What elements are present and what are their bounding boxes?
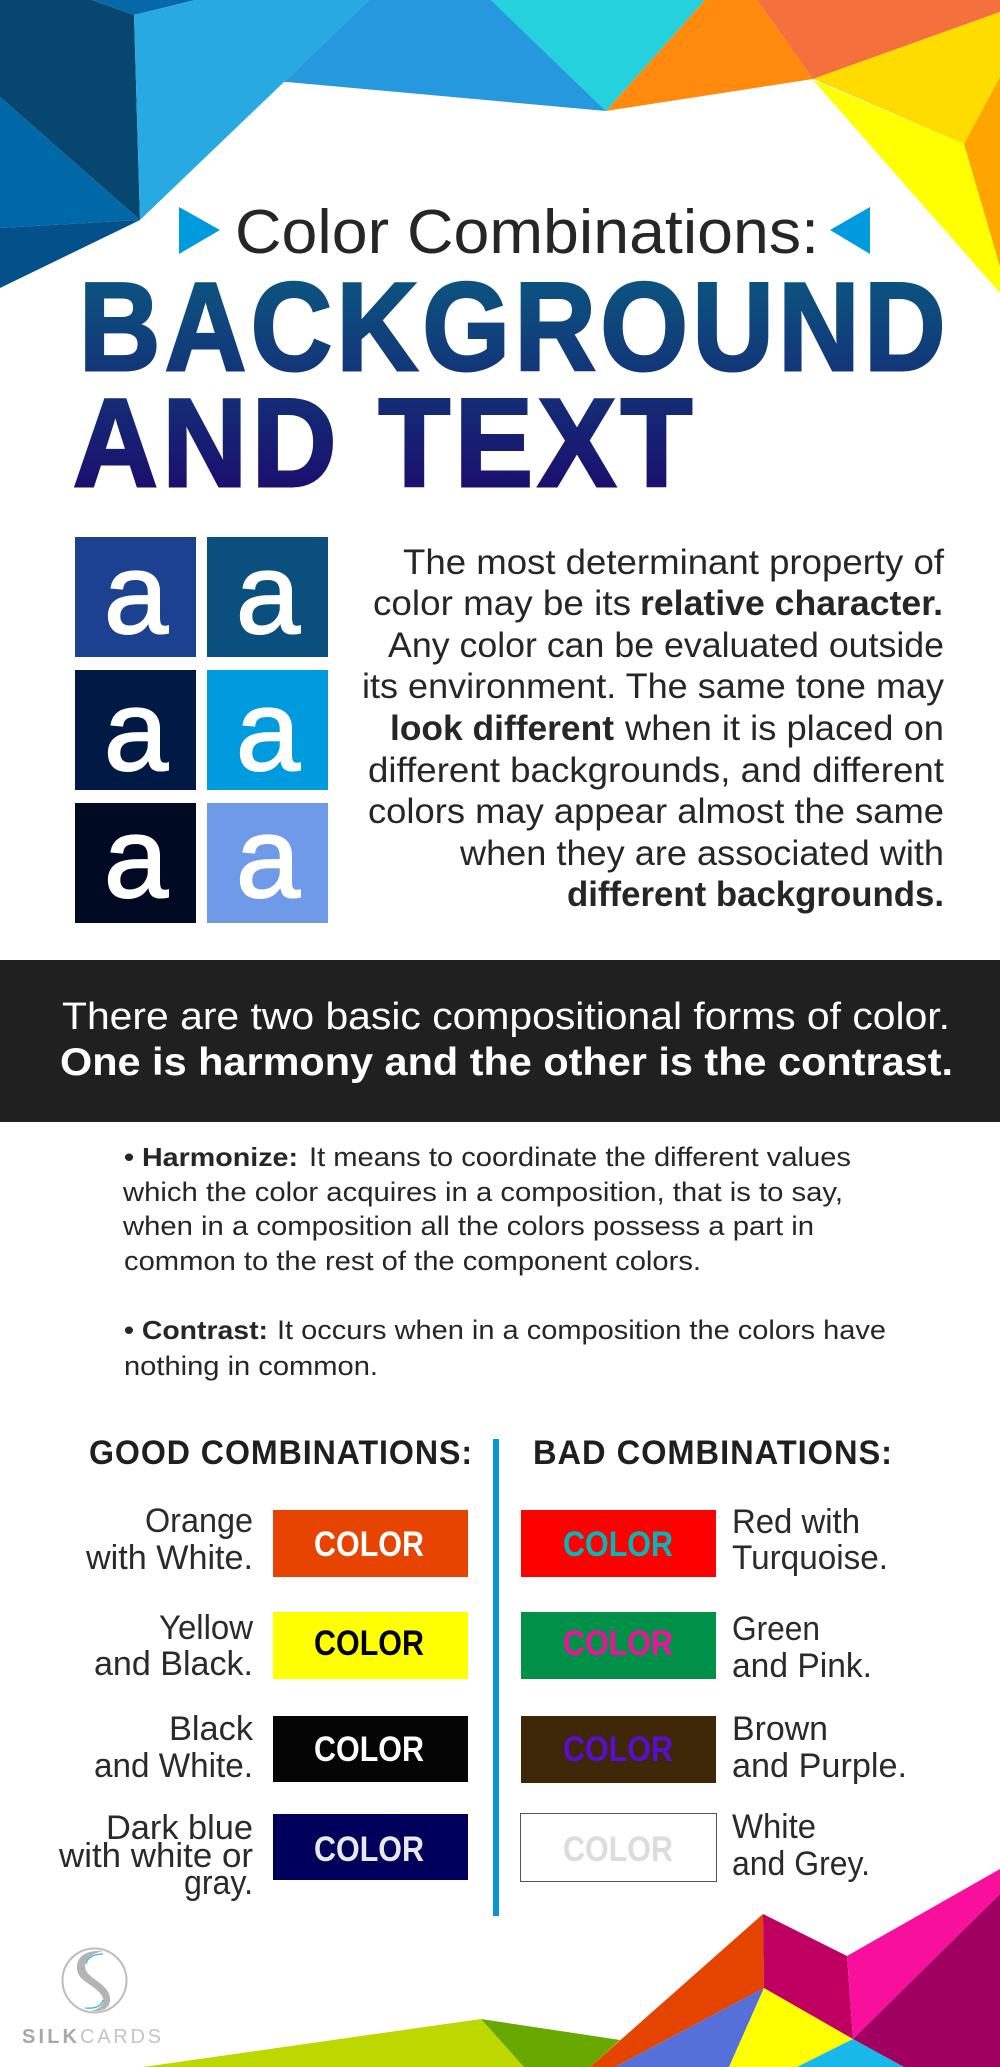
top polygon banner	[0, 0, 1000, 293]
panel: bad combinations	[520, 1434, 907, 1883]
subtitle text: Color Combinations:	[235, 198, 819, 267]
definitions: harmonize and contrast: It occurs when in a composition the colors have	[277, 1315, 886, 1345]
definitions: harmonize and contrast: • Harmonize:	[124, 1142, 298, 1172]
logo: silkcards	[22, 1948, 161, 2048]
swatch: yellow and black: Yellow	[159, 1609, 253, 1647]
intro paragraph: when they are associated with	[459, 834, 944, 873]
dark band	[0, 960, 1000, 1122]
icon: right arrow	[830, 207, 870, 254]
logo: silkcards: CARDS	[80, 2026, 161, 2048]
swatch: orange with white: Orange	[145, 1502, 253, 1540]
swatch grid: a	[104, 668, 169, 795]
swatch: white and grey: COLOR	[563, 1830, 673, 1869]
intro paragraph	[362, 543, 945, 914]
intro paragraph: relative character.	[640, 584, 943, 623]
swatch grid: a	[236, 531, 301, 658]
swatch grid: a	[104, 531, 169, 658]
swatch: brown and purple: Brown	[732, 1710, 828, 1748]
swatch: dark blue with white or gray: gray.	[184, 1864, 253, 1902]
definitions: harmonize and contrast: when in a composition all the colors possess a part in	[122, 1211, 814, 1241]
intro paragraph: Any color can be evaluated outside	[388, 626, 944, 665]
swatch: dark blue with white or gray	[58, 1809, 468, 1902]
icon: left arrow	[179, 207, 220, 254]
swatch: white and grey: White	[732, 1808, 816, 1846]
swatch: green and pink	[521, 1610, 872, 1685]
swatch: yellow and black: COLOR	[314, 1624, 424, 1663]
swatch: green and pink: COLOR	[563, 1624, 673, 1663]
swatch grid	[75, 531, 328, 923]
swatch: red with turquoise	[521, 1503, 888, 1577]
swatch: dark blue with white or gray: with white or	[58, 1837, 253, 1875]
definitions: harmonize and contrast: nothing in common.	[124, 1351, 378, 1381]
intro paragraph: look different	[390, 709, 614, 748]
swatch: orange with white: with White.	[85, 1539, 253, 1577]
swatch: white and grey: and Grey.	[732, 1845, 870, 1883]
swatch: black and white	[94, 1710, 468, 1785]
definitions: harmonize and contrast: which the color acquires in a composition, that is to say,	[122, 1177, 843, 1207]
heading: background and text	[73, 258, 950, 513]
definitions: harmonize and contrast: • Contrast:	[124, 1315, 268, 1345]
swatch: red with turquoise: Red with	[732, 1503, 860, 1541]
swatch: orange with white	[85, 1502, 468, 1577]
dark band: There are two basic compositional forms of color.	[62, 996, 950, 1038]
heading: background and text: AND TEXT	[73, 374, 697, 513]
intro paragraph: The most determinant property of	[403, 543, 944, 582]
swatch: black and white: COLOR	[314, 1730, 424, 1769]
swatch grid: a	[236, 668, 301, 795]
swatch: brown and purple: COLOR	[563, 1730, 673, 1769]
logo: silkcards: SILK	[22, 2026, 78, 2048]
intro paragraph: its environment. The same tone may	[362, 667, 945, 706]
swatch: red with turquoise: COLOR	[563, 1525, 673, 1564]
panel: good combinations	[58, 1434, 473, 1902]
swatch: dark blue with white or gray: COLOR	[314, 1830, 424, 1869]
swatch: brown and purple	[521, 1710, 907, 1785]
definitions: harmonize and contrast: It means to coordinate the different values	[309, 1142, 851, 1172]
intro paragraph: colors may appear almost the same	[368, 792, 944, 831]
swatch grid: a	[104, 795, 169, 922]
swatch: red with turquoise: Turquoise.	[732, 1539, 888, 1577]
bottom polygon banner	[143, 1869, 1000, 2067]
swatch: black and white: and White.	[94, 1747, 253, 1785]
swatch: brown and purple: and Purple.	[732, 1747, 907, 1785]
swatch: yellow and black	[94, 1609, 468, 1683]
definitions: harmonize and contrast: common to the rest of the component colors.	[124, 1246, 701, 1276]
vertical divider	[493, 1439, 499, 1916]
swatch: orange with white: COLOR	[314, 1525, 424, 1564]
swatch: dark blue with white or gray: Dark blue	[106, 1809, 253, 1847]
intro paragraph: color may be its	[373, 584, 631, 623]
definitions: harmonize and contrast	[122, 1142, 886, 1381]
intro paragraph: different backgrounds, and different	[368, 751, 944, 790]
heading: good combinations: GOOD COMBINATIONS:	[89, 1434, 473, 1472]
swatch grid: a	[236, 795, 301, 922]
swatch: green and pink: Green	[732, 1610, 820, 1648]
swatch: white and grey	[520, 1808, 870, 1883]
intro paragraph: when it is placed on	[624, 709, 944, 748]
title: Color Combinations	[179, 198, 870, 267]
heading: bad combinations: BAD COMBINATIONS:	[533, 1434, 893, 1472]
swatch: black and white: Black	[169, 1710, 254, 1748]
swatch: green and pink: and Pink.	[732, 1647, 872, 1685]
dark band: One is harmony and the other is the contrast.	[60, 1041, 953, 1084]
swatch: yellow and black: and Black.	[94, 1645, 253, 1683]
intro paragraph: different backgrounds.	[567, 875, 944, 914]
